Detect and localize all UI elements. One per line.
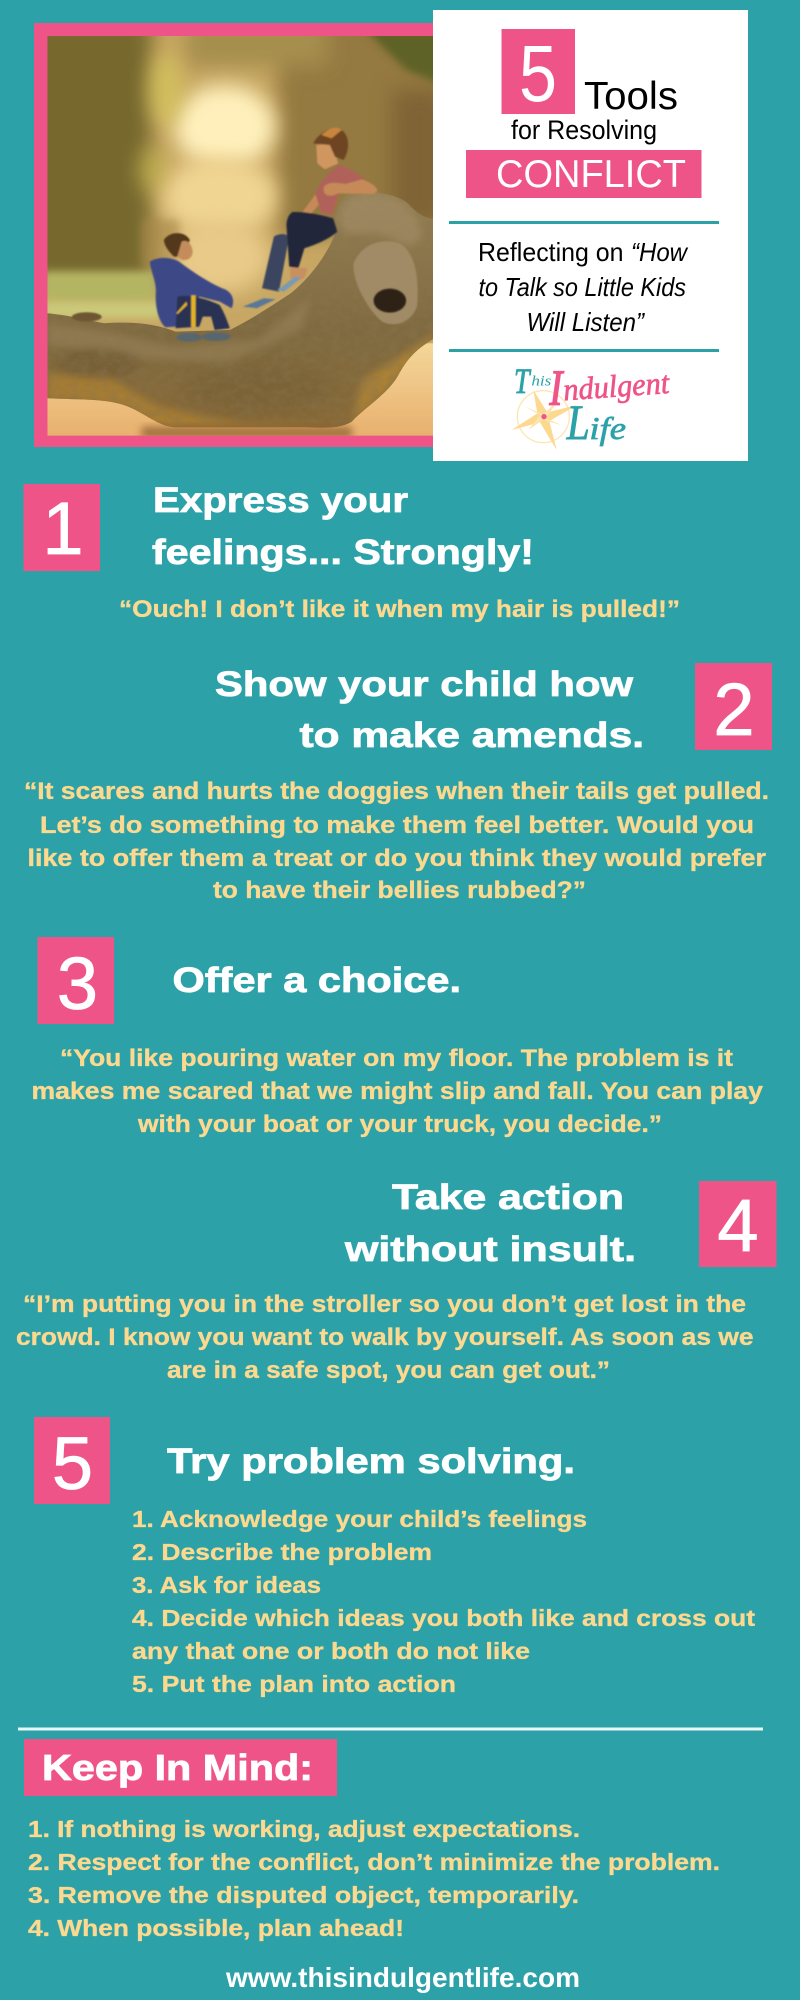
tool 4 quote: “I’m putting you in the stroller so you don’t get lost in the: [23, 1291, 746, 1318]
number 5 badge: 5: [519, 29, 557, 118]
title text: for Resolving: [511, 115, 657, 145]
tool 4 heading: Take action: [392, 1177, 624, 1217]
tool 4 quote: [16, 1291, 754, 1384]
logo: This Indulgent Life with compass: ife: [589, 412, 626, 447]
tool 1 heading: Express your: [153, 480, 408, 520]
tool 3: [32, 937, 764, 1138]
number badge 3: [38, 937, 114, 1025]
title text: [511, 75, 678, 145]
number 5 badge: [502, 29, 575, 118]
tool 2 heading: [215, 664, 644, 755]
keep in mind list: 1. If nothing is working, adjust expectations.: [28, 1816, 580, 1842]
tool 2 quote: Let’s do something to make them feel better. Would you: [40, 812, 754, 839]
tool 1 heading: feelings... Strongly!: [152, 532, 534, 572]
tool 4 quote: are in a safe spot, you can get out.”: [167, 1357, 610, 1384]
keep in mind list: 4. When possible, plan ahead!: [28, 1915, 404, 1941]
tool 2 quote: like to offer them a treat or do you think they would prefer: [28, 845, 766, 872]
tool 4 heading: [344, 1177, 636, 1269]
tool 2 quote: to have their bellies rubbed?”: [213, 877, 586, 904]
keep in mind list: [28, 1816, 720, 1941]
boy in blue hoodie: [150, 233, 233, 342]
subtitle: to Talk so Little Kids: [478, 272, 686, 302]
tool 5 steps list: any that one or both do not like: [132, 1638, 530, 1664]
number badge 5: 5: [52, 1422, 93, 1505]
tool 3 quote: with your boat or your truck, you decide.”: [137, 1111, 662, 1138]
subtitle: Reflecting on: [478, 237, 624, 267]
tool 1 quote: “Ouch! I don’t like it when my hair is pulled!”: [119, 596, 680, 623]
number badge 4: 4: [717, 1184, 759, 1267]
subtitle: “How: [631, 237, 689, 267]
keep in mind banner: [24, 1739, 337, 1796]
tool 5 steps list: 1. Acknowledge your child’s feelings: [132, 1506, 587, 1532]
tool 4 quote: crowd. I know you want to walk by yourself. As soon as we: [16, 1324, 754, 1351]
header photo panel with pink frame: [20, 17, 454, 447]
title text: Tools: [584, 75, 678, 118]
tool 1: [24, 480, 680, 623]
tool 3 quote: “You like pouring water on my floor. The problem is it: [60, 1045, 733, 1072]
tool 5 steps list: 3. Ask for ideas: [132, 1572, 321, 1598]
keep in mind section: [24, 1739, 720, 1941]
tool 5 steps list: [132, 1506, 755, 1697]
subtitle: Will Listen”: [526, 307, 645, 337]
subtitle: [478, 237, 689, 337]
website url: www.thisindulgentlife.com: [225, 1962, 580, 1993]
title card: [433, 10, 748, 461]
tool 2: [24, 663, 772, 904]
keep in mind list: 3. Remove the disputed object, temporarily.: [28, 1882, 579, 1908]
logo: This Indulgent Life with compass: his: [531, 373, 551, 389]
logo: This Indulgent Life with compass: I: [548, 359, 564, 416]
logo: This Indulgent Life with compass: ndulgent: [562, 364, 672, 407]
number badge 4: [699, 1181, 776, 1267]
conflict banner: CONFLICT: [496, 153, 686, 196]
tool 2 heading: Show your child how: [215, 664, 633, 704]
tool 5 steps list: 4. Decide which ideas you both like and cross out: [132, 1605, 755, 1631]
tool 3 heading: Offer a choice.: [172, 960, 461, 1000]
keep in mind list: 2. Respect for the conflict, don’t minimize the problem.: [28, 1849, 720, 1875]
logo: This Indulgent Life with compass: L: [566, 394, 590, 450]
number badge 1: 1: [42, 487, 84, 570]
photo: two boys sitting on a fallen tree trunk: [47, 36, 433, 436]
tool 5: [34, 1417, 755, 1697]
tool 1 heading: [152, 480, 534, 572]
tool 5 heading: Try problem solving.: [167, 1441, 575, 1481]
number badge 2: 2: [713, 668, 755, 751]
tool 5 steps list: 2. Describe the problem: [132, 1539, 432, 1565]
tool 4: [16, 1177, 776, 1384]
number badge 5: [34, 1417, 110, 1505]
trunk knot and hole: [353, 241, 418, 324]
tool 3 quote: [32, 1045, 764, 1138]
tool 3 quote: makes me scared that we might slip and fall. You can play: [32, 1078, 764, 1105]
number badge 2: [695, 663, 772, 751]
keep in mind banner: Keep In Mind:: [42, 1747, 313, 1788]
tool 2 quote: “It scares and hurts the doggies when their tails get pulled.: [24, 778, 769, 805]
boy in red shirt: [243, 128, 378, 308]
tool 2 heading: to make amends.: [300, 715, 644, 755]
number badge 1: [24, 484, 100, 571]
tool 5 steps list: 5. Put the plan into action: [132, 1671, 456, 1697]
logo: This Indulgent Life with compass: T: [514, 362, 531, 402]
tool 4 heading: without insult.: [344, 1229, 636, 1269]
tree trunk: [47, 190, 443, 430]
logo: This Indulgent Life with compass: [512, 359, 672, 450]
number badge 3: 3: [57, 942, 98, 1025]
tool 2 quote: [24, 778, 769, 904]
